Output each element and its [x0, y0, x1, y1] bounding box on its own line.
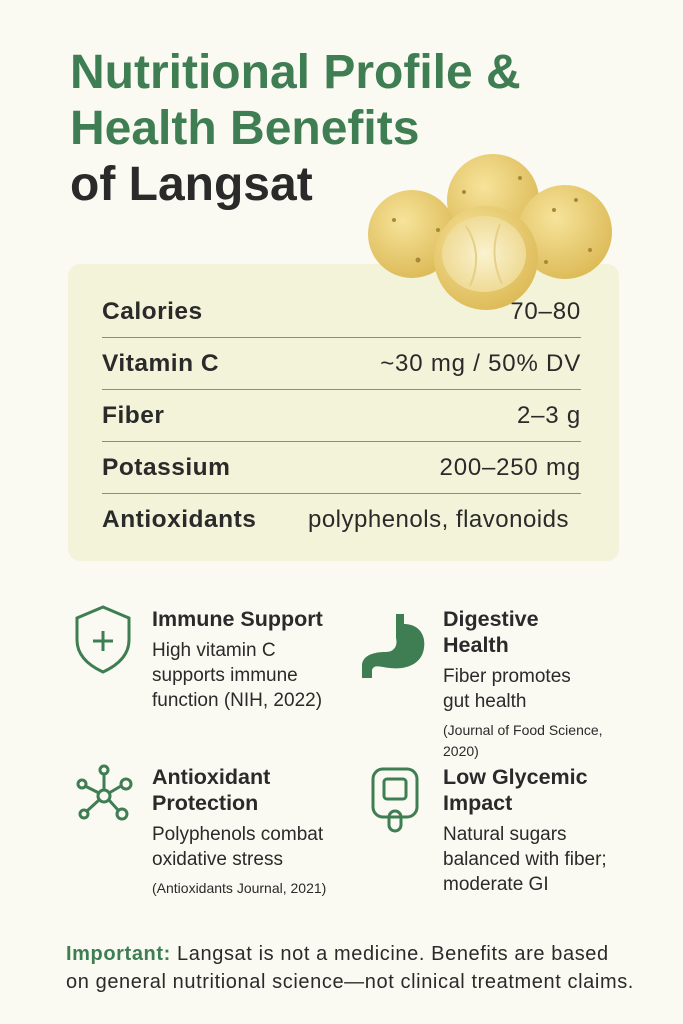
- text: digestive health: Fiber promotes: [443, 666, 571, 687]
- text: digestive health: Health: [443, 633, 509, 657]
- row: potassium: [102, 442, 581, 494]
- text: immune support: Immune Support: [152, 607, 323, 631]
- title: Health Benefits: [70, 102, 419, 155]
- illustration: langsat fruits: [368, 154, 612, 310]
- row: vitamin c: Vitamin C: [102, 350, 219, 376]
- text: digestive health: gut health: [443, 691, 526, 712]
- row: potassium: 200–250 mg: [440, 454, 581, 480]
- text: low glycemic impact: Natural sugars balanced with fiber; moderate GI: [443, 824, 607, 895]
- footer disclaimer: Important: Langsat is not a medicine. Benefits are based: [66, 943, 609, 965]
- text: immune support: High vitamin C supports immune function (NIH, 2022): [152, 640, 322, 711]
- text: digestive health: (Journal of Food Science,: [443, 722, 603, 738]
- row: fiber: Fiber: [102, 402, 164, 428]
- text: digestive health: [443, 607, 603, 759]
- benefit: low glycemic impact: [372, 765, 607, 895]
- icon: glucose meter: [372, 768, 418, 832]
- row: fiber: 2–3 g: [517, 402, 581, 428]
- text: digestive health: Digestive: [443, 607, 539, 631]
- icon: shield: [76, 605, 130, 674]
- row: antioxidants: Antioxidants: [102, 506, 256, 533]
- icon: stomach: [362, 614, 424, 678]
- text: immune support: [152, 607, 323, 711]
- title: of Langsat: [70, 158, 313, 211]
- row: calories: 70–80: [510, 298, 581, 324]
- text: low glycemic impact: [443, 765, 607, 895]
- benefit: immune support: [76, 605, 323, 711]
- text: digestive health: 2020): [443, 743, 479, 759]
- row: antioxidants: polyphenols, flavonoids: [308, 506, 569, 533]
- text: antioxidant protection: [152, 765, 326, 896]
- row: fiber: [102, 390, 581, 442]
- text: low glycemic impact: Impact: [443, 791, 512, 815]
- title: Nutritional Profile &: [70, 46, 521, 99]
- row: vitamin c: ~30 mg / 50% DV: [380, 350, 581, 376]
- row: vitamin c: [102, 338, 581, 390]
- benefit: antioxidant protection: [76, 764, 326, 896]
- row: calories: [102, 286, 581, 338]
- text: antioxidant protection: (Antioxidants Journal, 2021): [152, 880, 326, 896]
- row: potassium: Potassium: [102, 454, 230, 480]
- footer disclaimer: on general nutritional science—not clinical treatment claims.: [66, 971, 634, 993]
- text: antioxidant protection: Antioxidant: [152, 765, 270, 789]
- text: antioxidant protection: Protection: [152, 791, 258, 815]
- row: calories: Calories: [102, 298, 203, 324]
- text: low glycemic impact: Low Glycemic: [443, 765, 588, 789]
- text: antioxidant protection: Polyphenols combat oxidative stress: [152, 824, 323, 870]
- footer disclaimer: [66, 943, 634, 993]
- icon: molecule: [76, 764, 132, 820]
- benefit: digestive health: [362, 607, 603, 759]
- panel: nutrition table: [68, 264, 619, 561]
- title: [70, 46, 521, 211]
- row: antioxidants: [102, 506, 569, 533]
